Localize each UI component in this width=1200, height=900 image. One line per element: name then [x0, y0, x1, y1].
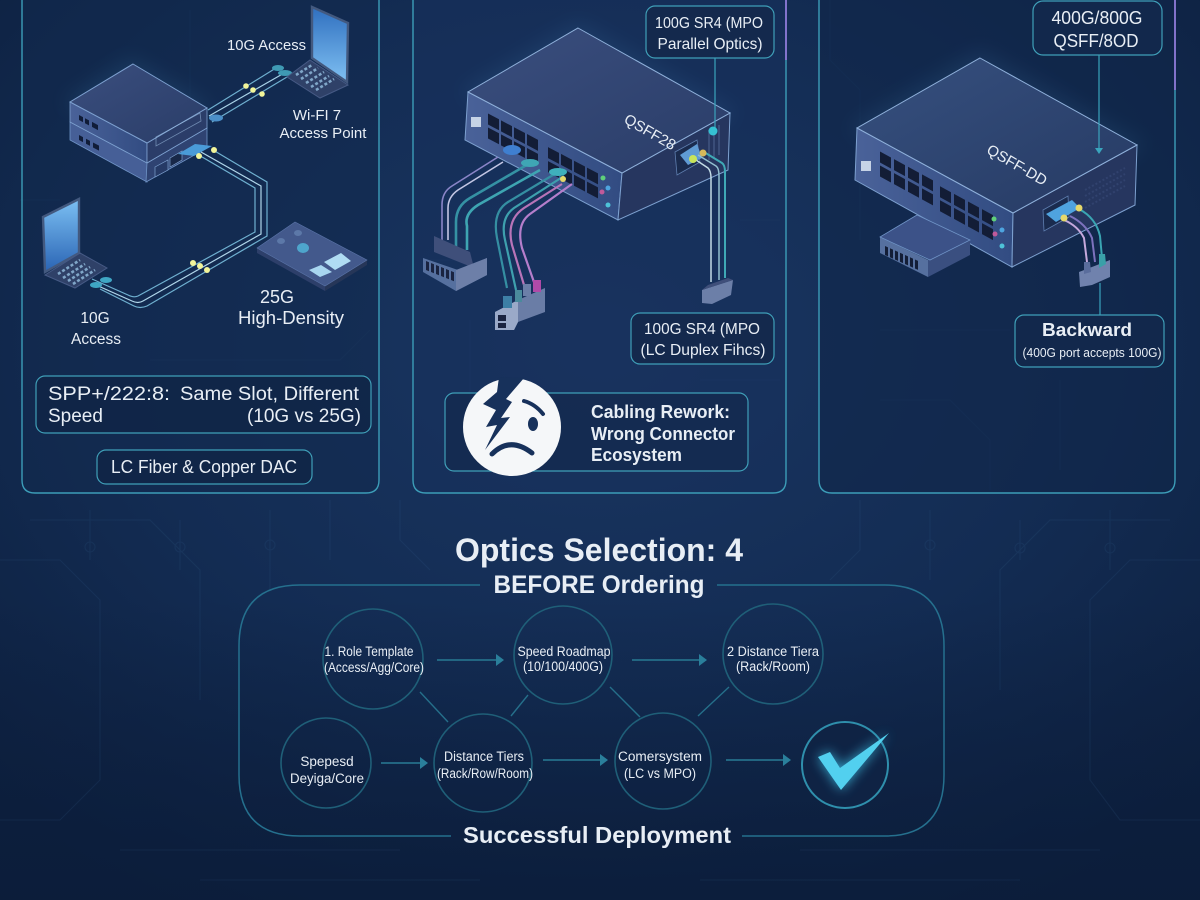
label: QSFP-DD device text: QSFF-DD [984, 141, 1050, 190]
icon: 25G high density device [257, 222, 367, 291]
callout: 100G SR4 top: 100G SR4 (MPO [655, 15, 763, 32]
callout: SFP slot note: SPP+/222:8: [48, 384, 170, 405]
icon: laptop top right [287, 7, 348, 98]
label: 10G Access lower: Access [71, 331, 121, 348]
icon: QSFP28 switch [460, 22, 738, 220]
flow node: role template: 1. Role Template [324, 644, 414, 659]
flow node: distance tiers bottom: Distance Tiers [444, 749, 524, 764]
label: QSFP28 device text: QSFF28 [621, 111, 679, 154]
callout: cabling rework warning: Cabling Rework: [591, 402, 730, 422]
label: front port cables [442, 145, 572, 290]
label: 10G Access top: 10G Access [227, 38, 306, 54]
callout: LC fiber and copper DAC: LC Fiber & Copper DAC [111, 457, 297, 477]
label: 10G Access lower: 10G [80, 310, 110, 327]
callout: backward compatibility: Backward [1042, 320, 1132, 340]
flow node: role template [323, 609, 424, 709]
icon: breakout connector middle [495, 280, 545, 330]
flow node: speed deploy: Deyiga/Core [290, 771, 364, 786]
flow node: speed roadmap: Speed Roadmap [518, 644, 610, 659]
callout: SFP slot note: Speed [48, 406, 103, 427]
flow node: distance tiers top: (Rack/Room) [736, 659, 810, 674]
label: right cables [689, 150, 725, 282]
flow node: connector ecosystem [615, 713, 711, 809]
callout: 100G SR4 bottom [631, 313, 774, 364]
label: QSFP-DD cables [1060, 204, 1102, 262]
flow node: distance tiers top [723, 604, 823, 704]
icon: QSFP-DD switch [848, 50, 1146, 267]
flow node: speed roadmap [514, 606, 612, 704]
heading: Optics Selection [455, 532, 743, 599]
callout: 100G SR4 bottom: (LC Duplex Fihcs) [640, 342, 766, 359]
flow node: connector ecosystem: (LC vs MPO) [624, 766, 696, 781]
callout: 100G SR4 top: Parallel Optics) [658, 36, 762, 53]
heading: Optics Selection: Optics Selection: 4 [455, 532, 743, 568]
panel: QSFP-DD core tier [819, 0, 1175, 493]
label: 25G High-Density: High-Density [238, 308, 344, 328]
callout: 400G/800G QSFP/800 [1033, 1, 1162, 154]
flow node: speed deploy: Spepesd [300, 754, 354, 769]
label: lower cables [90, 147, 267, 308]
callout: 400G/800G QSFP/800: 400G/800G [1052, 8, 1142, 28]
callout: backward compatibility: (400G port accepts 100G) [1022, 345, 1162, 360]
icon: stacked access switch [64, 58, 212, 182]
label: Wi-Fi 7 Access Point: Wi-FI 7 [293, 107, 341, 124]
flow node: distance tiers bottom: (Rack/Row/Room) [437, 766, 533, 781]
callout: 400G/800G QSFP/800: QSFF/8OD [1054, 31, 1138, 51]
flow node: distance tiers top: 2 Distance Tiera [727, 644, 819, 659]
label: upper cables to laptop [208, 65, 292, 122]
panel: selection flow [239, 585, 944, 836]
flow node: connector ecosystem: Comersystem [618, 749, 702, 764]
label: 25G High-Density: 25G [260, 287, 294, 307]
flow node: distance tiers bottom [434, 714, 533, 812]
icon: breakout connector left [423, 236, 487, 291]
icon: MPO connector right [702, 278, 733, 304]
flow node: speed deploy [281, 718, 371, 808]
flow node: speed roadmap: (10/100/400G) [523, 659, 603, 674]
callout: 100G SR4 top [646, 6, 774, 136]
icon: MPO connector QSFP-DD [1079, 254, 1110, 287]
icon: success check mark [802, 722, 889, 808]
arrows: flow arrows [381, 654, 791, 769]
label: 25G High-Density [238, 287, 344, 328]
panel: SFP access tier [22, 0, 379, 493]
callout: SFP slot note: (10G vs 25G) [247, 406, 361, 427]
callout: cabling rework warning [445, 393, 748, 471]
callout: cabling rework warning: Ecosystem [591, 445, 682, 465]
callout: LC fiber and copper DAC [97, 450, 312, 484]
icon: small transceiver device [880, 215, 970, 277]
heading: Optics Selection: BEFORE Ordering [494, 571, 704, 599]
label: Wi-Fi 7 Access Point [280, 107, 367, 142]
callout: cabling rework warning: Wrong Connector [591, 424, 735, 444]
flow node: role template: (Access/Agg/Core) [324, 660, 424, 675]
callout: SFP slot note: Same Slot, Different [180, 384, 360, 405]
callout: 100G SR4 bottom: 100G SR4 (MPO [644, 321, 760, 338]
panel: QSFP28 aggregation tier [413, 0, 786, 493]
icon: sad face with lightning crack [463, 377, 561, 476]
callout: backward compatibility [1015, 283, 1164, 367]
label: 10G Access lower [71, 310, 121, 348]
label: Wi-Fi 7 Access Point: Access Point [280, 125, 367, 142]
heading: Successful Deployment: Successful Deployment [463, 822, 731, 848]
icon: laptop lower left [43, 199, 107, 288]
callout: SFP slot note [36, 376, 371, 433]
